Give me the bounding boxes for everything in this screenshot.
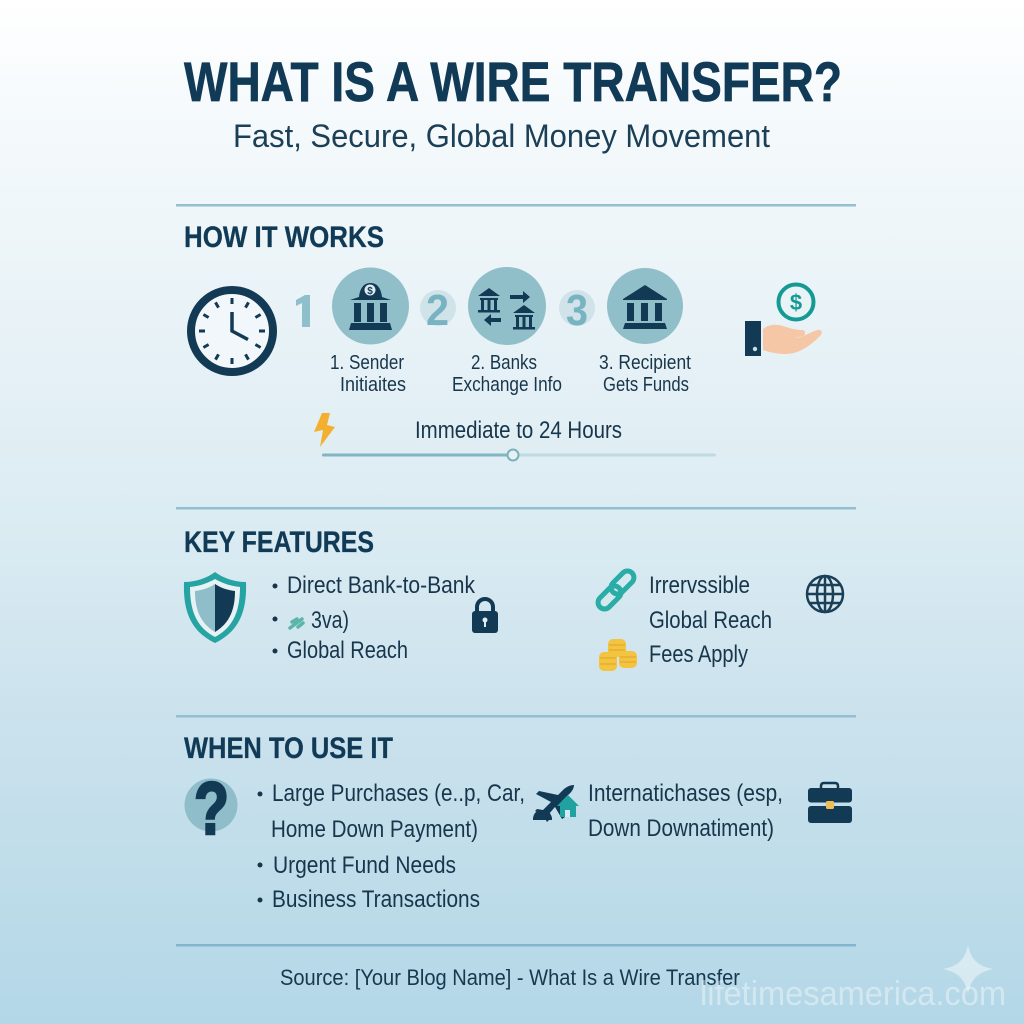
label: sender initiates xyxy=(330,352,406,396)
step number 2 xyxy=(420,286,456,335)
use case list: Home Down Payment) xyxy=(271,816,478,843)
step number 1 xyxy=(296,295,310,327)
feature list right: Irrervssible xyxy=(649,572,750,599)
heading: key features: KEY FEATURES xyxy=(184,526,374,559)
label: recipient gets funds: 3. Recipient xyxy=(599,352,691,374)
label: banks exchange info: 2. Banks xyxy=(471,352,537,374)
icon: plane, car and house xyxy=(533,785,579,822)
label: sender initiates: 1. Sender xyxy=(330,352,404,374)
label: banks exchange info: Exchange Info xyxy=(452,374,562,396)
feature list right: Global Reach xyxy=(649,607,772,634)
feature list left: Global Reach xyxy=(287,637,408,664)
label: banks exchange info xyxy=(452,352,562,396)
panel: how it works xyxy=(184,221,822,460)
feature list left: Direct Bank-to-Bank xyxy=(287,572,476,599)
icon: chain link xyxy=(595,568,637,612)
icon: briefcase xyxy=(808,783,852,823)
icon: coins xyxy=(599,639,637,671)
label: recipient gets funds xyxy=(599,352,691,396)
watermark: lifetimesamerica.com xyxy=(700,975,1006,1013)
icon: hand receiving money xyxy=(745,284,822,356)
step number 2: 2 xyxy=(426,286,449,335)
icon: lightning bolt xyxy=(314,413,335,447)
icon: globe xyxy=(807,576,843,612)
feature list right: Fees Apply xyxy=(649,641,748,668)
icon: sender bank xyxy=(332,268,409,344)
step number 3: 3 xyxy=(566,286,588,335)
use case list xyxy=(258,780,525,913)
watermark xyxy=(700,945,1006,1013)
icon: hand receiving money: $ xyxy=(790,290,802,315)
heading: how it works: HOW IT WORKS xyxy=(184,221,384,254)
icon: garbled chain xyxy=(290,619,303,628)
label: timing: Immediate to 24 Hours xyxy=(415,417,622,444)
label: sender initiates: Initiaites xyxy=(340,374,406,396)
icon: shield xyxy=(184,572,246,643)
feature list left xyxy=(272,572,476,664)
use case list continued xyxy=(588,780,783,842)
icon: question mark: ? xyxy=(194,767,229,850)
use case list: Business Transactions xyxy=(272,886,480,913)
icon: banks exchanging xyxy=(468,267,546,345)
icon: padlock xyxy=(472,599,498,633)
heading: when to use it: WHEN TO USE IT xyxy=(184,732,393,765)
title: WHAT IS A WIRE TRANSFER? xyxy=(184,50,842,113)
label: recipient gets funds: Gets Funds xyxy=(603,374,689,396)
feature list right xyxy=(649,572,772,668)
source line: Source: [Your Blog Name] - What Is a Wire Transfer xyxy=(280,965,740,990)
use case list: Urgent Fund Needs xyxy=(273,852,456,879)
feature list left: 3va) xyxy=(311,607,349,634)
subtitle: Fast, Secure, Global Money Movement xyxy=(233,118,770,154)
use case list: Large Purchases (e..p, Car, xyxy=(272,780,525,807)
panel: when to use it xyxy=(184,732,852,913)
icon: recipient bank xyxy=(607,268,683,344)
use case list continued: Internatichases (esp, xyxy=(588,780,783,807)
use case list continued: Down Downatiment) xyxy=(588,815,774,842)
timeline slider xyxy=(322,450,716,460)
step number 3 xyxy=(559,286,595,335)
icon: sender bank: $ xyxy=(367,286,373,297)
panel: key features xyxy=(184,526,843,671)
icon: clock xyxy=(191,290,273,372)
